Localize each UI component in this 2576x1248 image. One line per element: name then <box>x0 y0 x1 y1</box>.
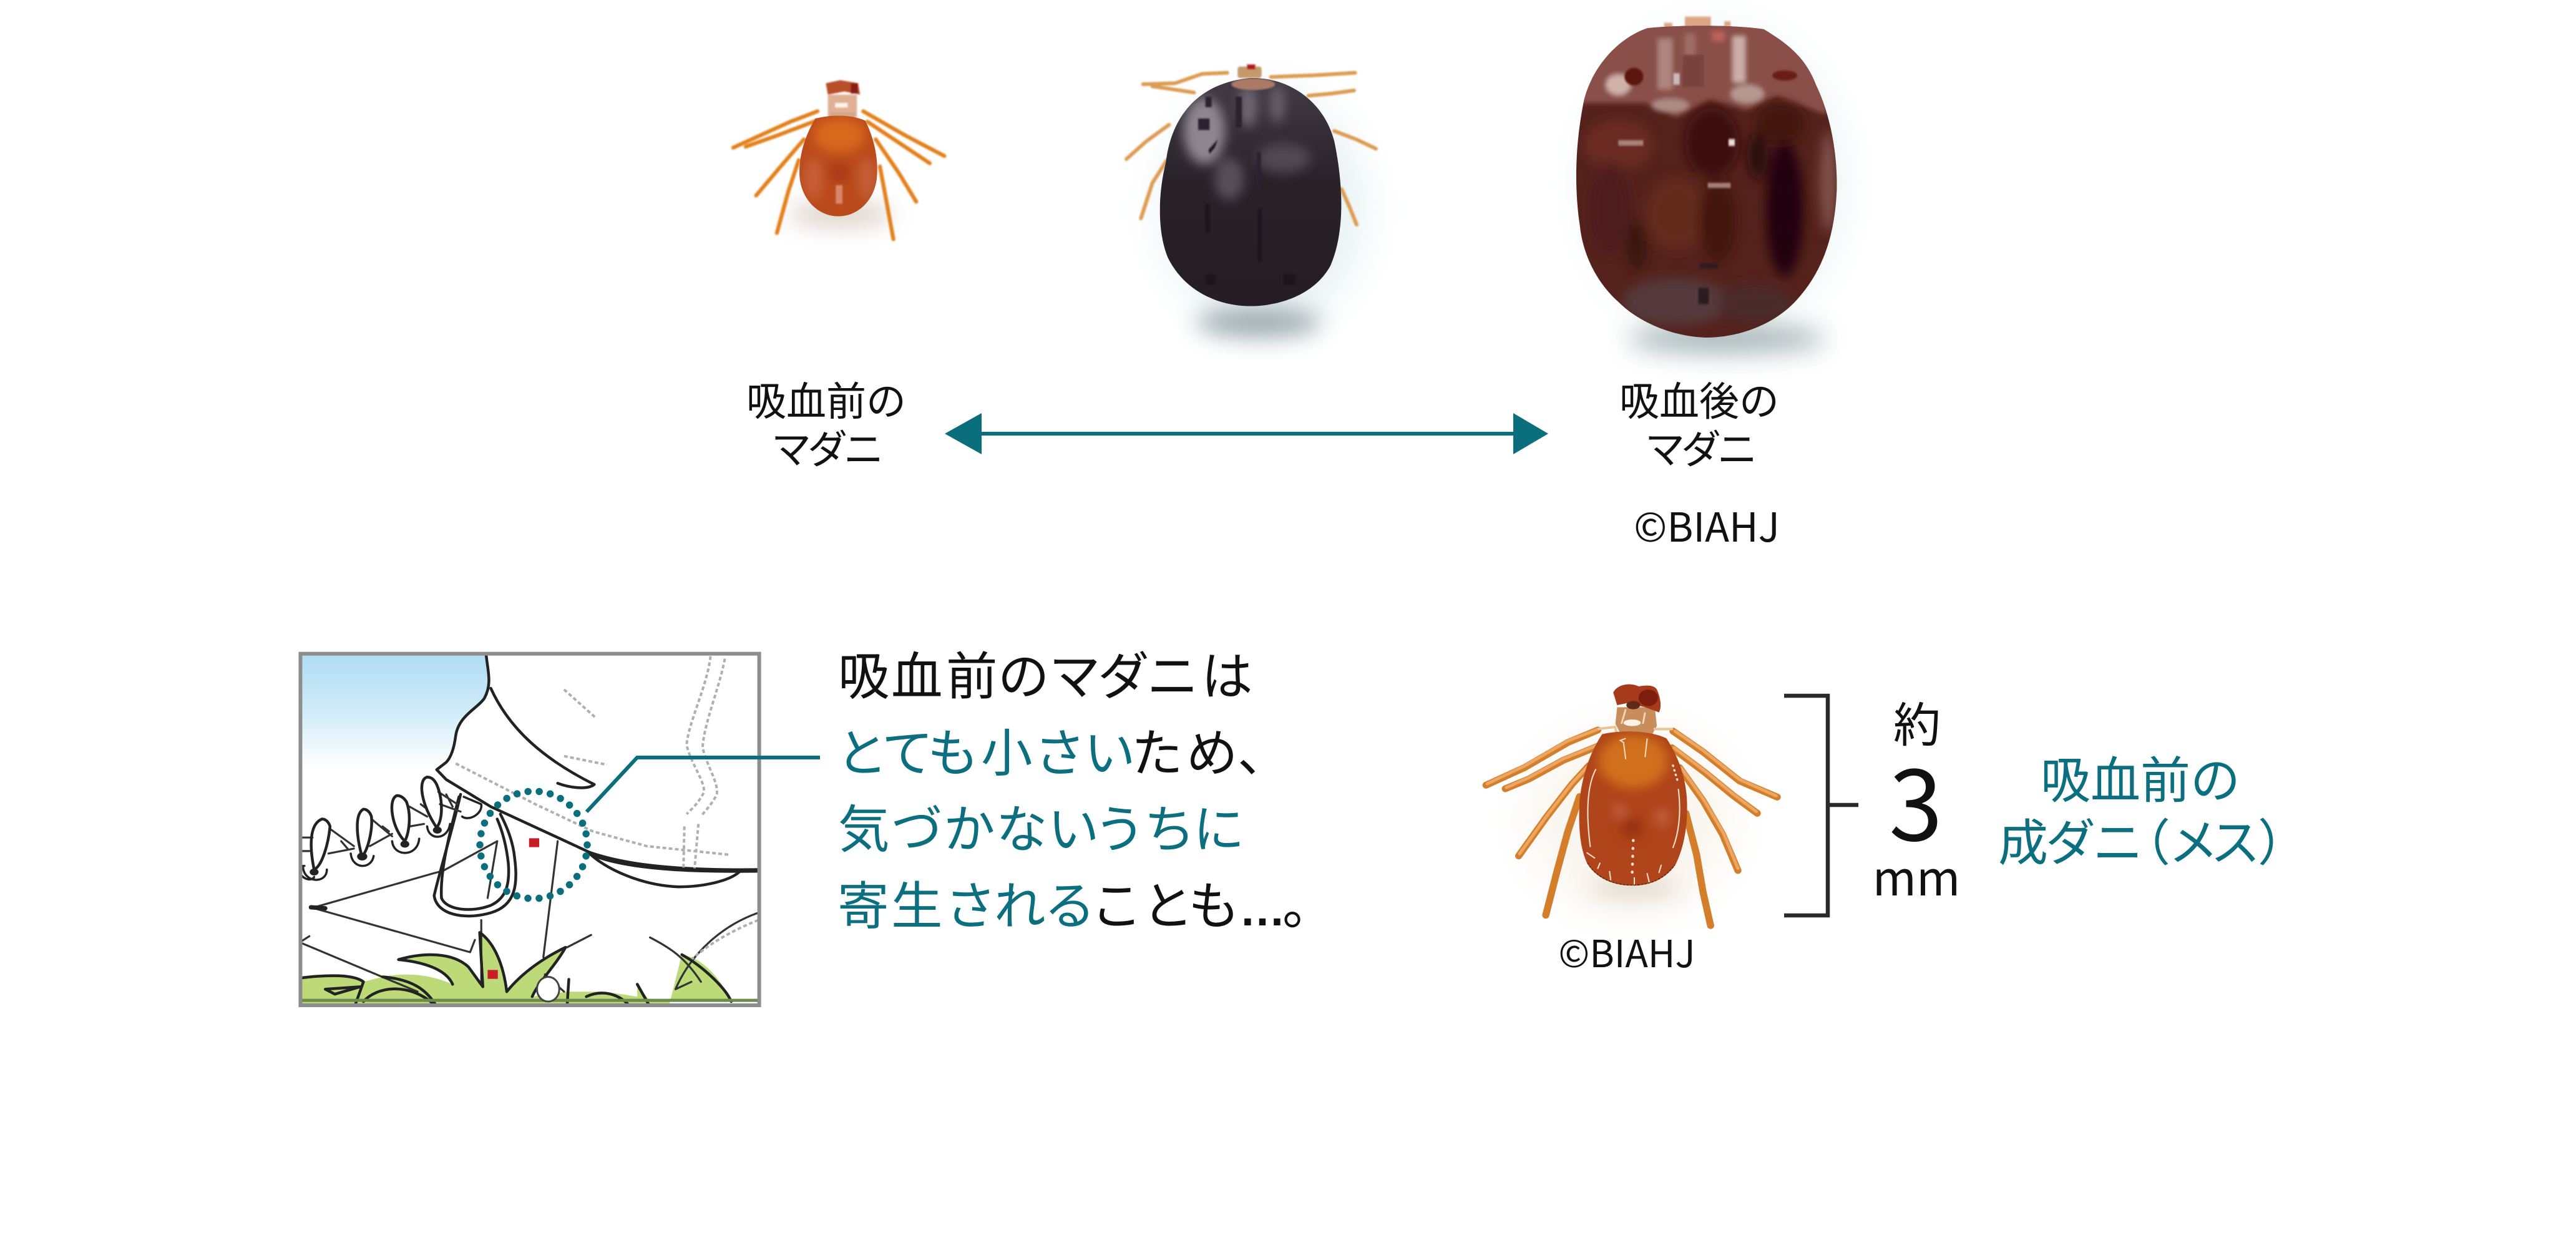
sky <box>300 654 489 769</box>
paragraph line 2: ため、 <box>1131 711 1289 786</box>
grass dark detail <box>300 932 731 1004</box>
size: mm: mm <box>1873 841 1960 909</box>
tick legs <box>1126 73 1376 225</box>
dotted circle: highlight on tick <box>480 791 587 899</box>
tick shadow <box>1589 34 1839 353</box>
tick legs <box>1486 729 1777 925</box>
shoe and leg outlines <box>300 654 760 1004</box>
paragraph line 4: 。 <box>1282 864 1334 939</box>
photo: partly fed tick (medium, dark) <box>1126 64 1376 337</box>
label: tick before feeding: 吸血前の <box>746 370 906 427</box>
paragraph line 3: 気づかないうちに <box>838 787 1244 862</box>
tick body <box>1573 22 1841 341</box>
grass <box>300 932 729 1005</box>
caption line 1: 吸血前の <box>2041 741 2240 813</box>
tick capitulum <box>1237 64 1262 78</box>
tick dot on grass <box>487 970 498 979</box>
photo: adult female tick before feeding <box>1486 685 1777 925</box>
callout line <box>587 758 820 812</box>
illustration frame <box>300 654 759 1005</box>
tick shadow <box>1163 92 1362 337</box>
label: tick after feeding, line 2: マダニ <box>1645 418 1754 475</box>
photo: engorged tick (large, red-brown) <box>1573 17 1841 353</box>
size: 3: 3 <box>1889 728 1943 869</box>
tick shadow <box>788 202 892 227</box>
tick body <box>799 115 877 217</box>
size: about: 約 <box>1893 687 1941 756</box>
label: tick before feeding, line 2: マダニ <box>771 418 880 475</box>
illustration: shoe and ankle with ticks <box>300 654 760 1005</box>
tick shadow <box>1587 880 1682 897</box>
photo: tick before feeding (small) <box>733 80 944 239</box>
tick halo <box>1527 728 1733 911</box>
paragraph line 4: ことも <box>1091 864 1239 939</box>
tick mouthparts <box>1664 17 1730 28</box>
size bracket <box>1784 696 1858 915</box>
dashed seams <box>456 656 729 869</box>
paragraph line 4: … <box>1239 884 1286 935</box>
paragraph line 2: とても小さい <box>836 711 1136 786</box>
paragraph line 4: 寄生される <box>837 864 1096 939</box>
credit: photo copyright adult: ©BIAHJ <box>1558 924 1695 978</box>
double-headed arrow: size comparison <box>945 413 1548 454</box>
paragraph line 1: 吸血前のマダニは <box>838 635 1253 709</box>
credit: photo copyright top: ©BIAHJ <box>1634 496 1780 553</box>
caption: adult female <box>1998 741 2308 875</box>
tick body <box>1154 75 1348 310</box>
label: tick after feeding: 吸血後の <box>1619 370 1779 427</box>
shoe laces <box>300 777 481 880</box>
tick legs <box>733 111 944 239</box>
tick body <box>1579 731 1687 886</box>
tick capitulum <box>826 80 860 125</box>
paragraph: explanation <box>836 635 1334 939</box>
tick dot on leg <box>529 838 539 847</box>
caption line 2: 成ダニ（メス） <box>1998 803 2308 875</box>
tick capitulum <box>1598 685 1673 743</box>
